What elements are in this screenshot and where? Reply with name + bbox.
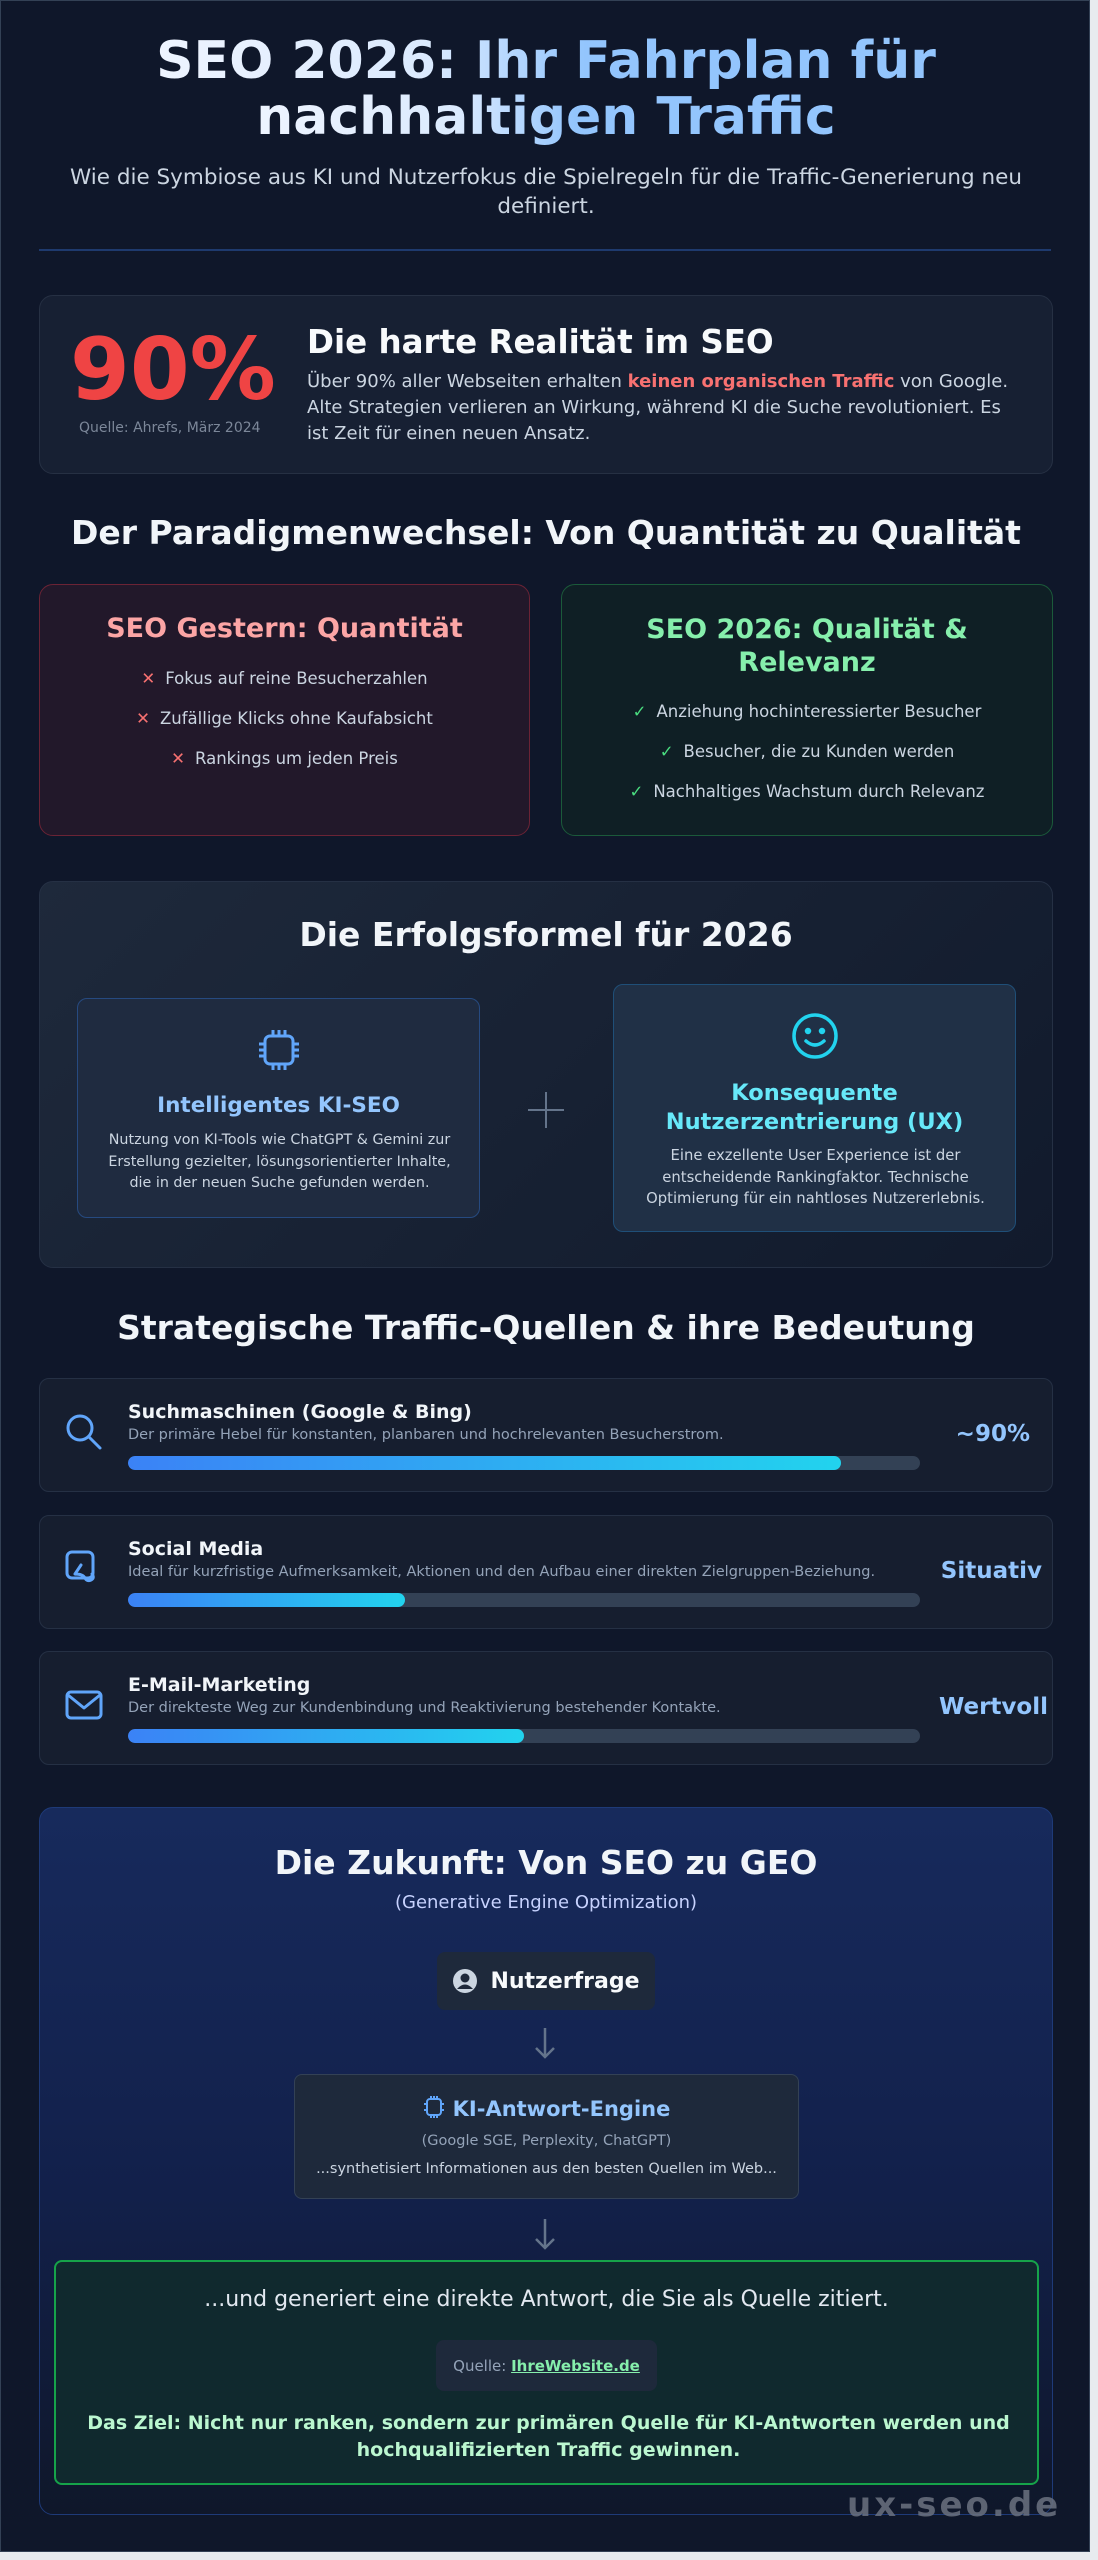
list: ✕ Rankings um jeden Preis [171, 749, 398, 768]
arrow [535, 2219, 555, 2250]
box: Nutzerfrage: Nutzerfrage [490, 1968, 640, 1994]
card: Social Media [39, 1515, 1053, 1629]
title: Intelligentes KI-SEO [157, 1093, 400, 1118]
goal: Das Ziel: Nicht nur ranken, sondern zur primären Quelle für KI-Antworten werden und hochqualifizierten Traffic gewinnen. [87, 2412, 1010, 2461]
source: Quelle: Ahrefs, März 2024 [79, 420, 261, 436]
card: UX [613, 984, 1016, 1232]
heading [646, 614, 968, 678]
source pill [436, 2340, 657, 2391]
heading: Die harte Realität im SEO [307, 323, 774, 361]
panel: GEO [39, 1807, 1053, 2515]
icon: chip [259, 1030, 299, 1070]
list: ✓ Anziehung hochinteressierter Besucher [633, 702, 981, 721]
box: Nutzerfrage [437, 1952, 655, 2010]
card: E-Mail: Wertvoll [939, 1694, 1048, 1720]
text: ...synthetisiert Informationen aus den besten Quellen im Web... [316, 2161, 777, 2177]
title: Nutzerzentrierung (UX) [666, 1109, 963, 1135]
panel: SEO 2026 [561, 584, 1053, 836]
list: ✓ Besucher, die zu Kunden werden [660, 742, 954, 761]
icon: social [66, 1550, 95, 1582]
arrow [535, 2028, 555, 2059]
heading: Relevanz [738, 647, 876, 678]
card: E-Mail: E-Mail-Marketing [128, 1674, 310, 1696]
title: SEO 2026: Ihr Fahrplan für [156, 31, 936, 91]
title: nachhaltigen Traffic [256, 87, 836, 147]
card: Suchmaschinen: ~90% [956, 1421, 1030, 1447]
subtitle: (Generative Engine Optimization) [395, 1892, 697, 1913]
list: ✕ Zufällige Klicks ohne Kaufabsicht [136, 709, 433, 728]
card: Suchmaschinen: Der primäre Hebel für konstanten, planbaren und hochrelevanten Besucherstrom. [128, 1427, 724, 1443]
source pill: Quelle: [453, 2356, 506, 2374]
sub: (Google SGE, Perplexity, ChatGPT) [422, 2133, 671, 2149]
title: KI-Antwort-Engine [453, 2097, 670, 2121]
icon: search [66, 1414, 102, 1450]
panel: Erfolgsformel [39, 881, 1053, 1268]
card: Social Media: Situativ [941, 1558, 1042, 1584]
icon: user [453, 1969, 477, 1993]
box: KI-Antwort-Engine [294, 2074, 799, 2199]
watermark: ux-seo.de [847, 2485, 1061, 2525]
card: Suchmaschinen [39, 1378, 1053, 1492]
title [666, 1080, 963, 1135]
heading: SEO Gestern: Quantität [106, 613, 463, 644]
card: E-Mail [39, 1651, 1053, 1765]
heading: Die Zukunft: Von SEO zu GEO [275, 1843, 817, 1882]
card: Social Media: Social Media [128, 1538, 263, 1560]
panel: SEO gestern [39, 584, 530, 836]
icon: mail [66, 1690, 102, 1720]
title: Konsequente [731, 1080, 898, 1106]
heading: paradigm: Der Paradigmenwechsel: Von Quantität zu Qualität [71, 513, 1021, 552]
panel: stat [39, 295, 1053, 474]
list: ✕ Fokus auf reine Besucherzahlen [141, 669, 428, 688]
list [630, 702, 984, 801]
text block: Über 90% aller Webseiten erhalten keinen organischen Traffic von Google. Alte Strategien verlieren an Wirkung, während KI die Suche revolutioniert. Es ist Zeit für einen neuen Ansatz. [307, 371, 1008, 444]
subtitle: Wie die Symbiose aus KI und Nutzerfokus die Spielregeln für die Traffic-Generierung neu definiert. [70, 165, 1022, 219]
text: Nutzung von KI-Tools wie ChatGPT & Gemini zur Erstellung gezielter, lösungsorientierter Inhalte, die in der neuen Suche gefunden werden. [108, 1132, 451, 1191]
heading: SEO 2026: Qualität & [646, 614, 968, 645]
card: E-Mail: Der direkteste Weg zur Kundenbindung und Reaktivierung bestehender Kontakte. [128, 1700, 721, 1716]
heading: Die Erfolgsformel für 2026 [299, 915, 793, 954]
source pill: IhreWebsite.de [511, 2356, 640, 2374]
heading: traffic sources: Strategische Traffic-Quellen & ihre Bedeutung [117, 1308, 975, 1347]
text: Eine exzellente User Experience ist der entscheidende Rankingfaktor. Technische Optimierung für ein nahtloses Nutzererlebnis. [646, 1147, 985, 1207]
list [136, 669, 433, 768]
card: KI-SEO [77, 998, 480, 1218]
list: ✓ Nachhaltiges Wachstum durch Relevanz [630, 782, 984, 801]
title [156, 31, 936, 147]
card: Suchmaschinen: Suchmaschinen (Google & Bing) [128, 1401, 472, 1423]
icon: smile [792, 1013, 838, 1059]
box: result [54, 2260, 1039, 2485]
card: Social Media: Ideal für kurzfristige Aufmerksamkeit, Aktionen und den Aufbau einer direkten Zielgruppen-Beziehung. [128, 1564, 875, 1580]
text: ...und generiert eine direkte Antwort, die Sie als Quelle zitiert. [204, 2287, 889, 2312]
big number 90%: 90% [70, 320, 276, 420]
icon: plus [528, 1092, 564, 1128]
